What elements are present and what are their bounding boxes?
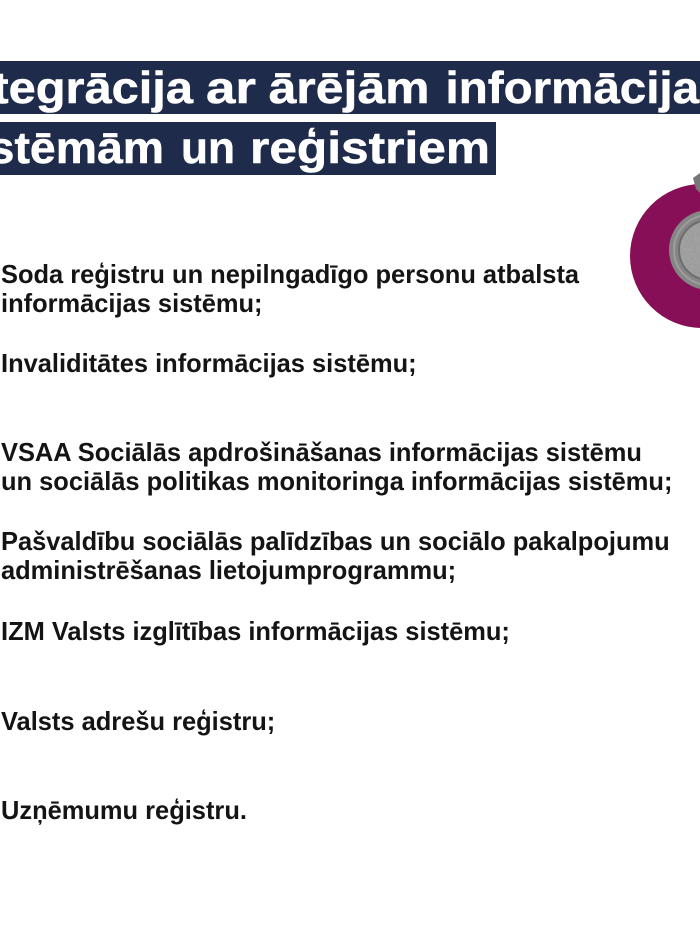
title line 2: reģistriem [250,124,490,173]
item: VSAA [1,439,672,496]
icon: plate on purple circle [630,173,700,328]
item: Soda reģistrs: informācijas sistēmu; [1,290,263,318]
item: Soda reģistrs: Soda reģistru un nepilngadīgo personu atbalsta [1,261,579,289]
item: adrešu reģistrs: Valsts adrešu reģistru; [1,708,275,736]
title line 1: ar [206,64,256,113]
item: Pašvaldību: administrēšanas lietojumprogrammu; [1,557,456,585]
item: Soda reģistrs [1,261,580,318]
title [0,61,700,175]
title line 2 [0,122,496,175]
item: VSAA: un sociālās politikas monitoringa informācijas sistēmu; [1,468,672,496]
item: IZM: IZM Valsts izglītības informācijas sistēmu; [1,618,510,646]
title line 1: informācijas [446,64,700,113]
list of systems [1,261,672,825]
title line 1: ārējām [268,64,430,113]
title line 2: un [181,124,235,173]
item: Invaliditātes: Invaliditātes informācijas sistēmu; [1,350,417,378]
item: Pašvaldību: Pašvaldību sociālās palīdzības un sociālo pakalpojumu [1,528,670,556]
title line 1 [0,61,700,114]
item: Pašvaldību [1,528,670,585]
item: VSAA: VSAA Sociālās apdrošināšanas informācijas sistēmu [1,439,642,467]
item: Uzņēmumu reģistrs: Uzņēmumu reģistru. [1,797,247,825]
